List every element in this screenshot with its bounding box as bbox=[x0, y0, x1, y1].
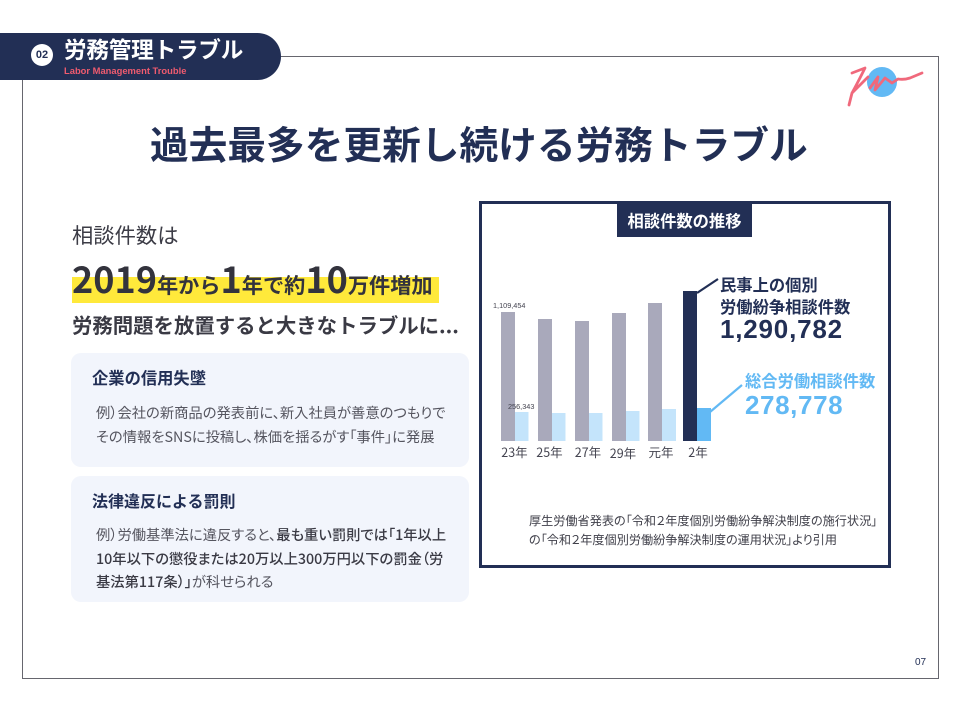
year axis labels bbox=[501, 442, 708, 462]
source note: の「令和２年度個別労働紛争解決制度の運用状況」より引用 bbox=[529, 531, 837, 548]
highlighted headline: 2019年から1年で約10万件増加 bbox=[72, 252, 433, 304]
year axis labels: 23年 bbox=[501, 442, 528, 461]
highlight stripe bbox=[72, 277, 439, 303]
page number: 07 bbox=[915, 657, 926, 668]
data labels: 256,343 bbox=[508, 402, 534, 411]
source note: 厚生労働省発表の「令和２年度個別労働紛争解決制度の施行状況」 bbox=[529, 512, 877, 529]
callout: total labor consultations bbox=[745, 368, 875, 420]
main title: 過去最多を更新し続ける労務トラブル bbox=[150, 115, 808, 171]
sub headline: 労務問題を放置すると大きなトラブルに... bbox=[72, 309, 459, 339]
year axis labels: 25年 bbox=[536, 442, 563, 461]
section number badge bbox=[31, 44, 53, 66]
panel body: 10年以下の懲役または20万以上300万円以下の罰金（労 bbox=[96, 548, 443, 568]
section number badge: 02 bbox=[36, 49, 48, 61]
panel: consultation trend chart bbox=[479, 201, 891, 568]
panel body bbox=[96, 524, 446, 592]
data labels: 1,109,454 bbox=[493, 301, 525, 310]
leader line: total consultations bbox=[710, 385, 742, 412]
panel: legal penalties bbox=[71, 476, 469, 602]
logo: signature over blue circle bbox=[848, 66, 924, 106]
panel: corporate credibility bbox=[71, 353, 469, 467]
callout value: 1,290,782 bbox=[720, 314, 843, 344]
year axis labels: 2年 bbox=[688, 442, 708, 461]
year axis labels: 29年 bbox=[610, 443, 636, 462]
dispute consultation bars bbox=[515, 409, 676, 441]
callout value: 278,778 bbox=[745, 390, 843, 420]
lead text: 相談件数は bbox=[72, 219, 178, 250]
callout label: 民事上の個別 bbox=[720, 272, 818, 296]
year axis labels: 27年 bbox=[575, 442, 601, 461]
bar chart bbox=[493, 278, 743, 462]
panel heading: 企業の信用失墜 bbox=[92, 365, 206, 389]
leader line: civil disputes bbox=[697, 279, 718, 293]
panel body: 基法第117条）」が科せられる bbox=[96, 571, 274, 592]
latest total bar bbox=[683, 291, 697, 441]
section header pill bbox=[0, 33, 281, 80]
callout label bbox=[720, 272, 850, 318]
chart heading tab: 相談件数の推移 bbox=[628, 208, 741, 232]
year axis labels: 元年 bbox=[648, 442, 674, 461]
latest dispute bar bbox=[697, 408, 711, 441]
panel body: その情報をSNSに投稿し、株価を揺るがす「事件」に発展 bbox=[96, 426, 435, 447]
data labels bbox=[493, 301, 534, 411]
source note bbox=[529, 512, 877, 548]
panel body bbox=[96, 402, 445, 447]
total consultations bars bbox=[501, 303, 662, 441]
section title: 労務管理トラブル bbox=[64, 32, 243, 65]
chart heading tab bbox=[617, 201, 752, 237]
callout label: 総合労働相談件数 bbox=[745, 368, 875, 392]
panel heading: 法律違反による罰則 bbox=[92, 488, 236, 512]
panel body: 例）労働基準法に違反すると、最も重い罰則では「1年以上 bbox=[96, 524, 446, 545]
panel body: 例）会社の新商品の発表前に、新入社員が善意のつもりで bbox=[96, 402, 445, 423]
section subtitle: Labor Management Trouble bbox=[64, 65, 186, 76]
callout: civil individual labor disputes bbox=[720, 272, 850, 344]
callout label: 労働紛争相談件数 bbox=[720, 294, 850, 318]
